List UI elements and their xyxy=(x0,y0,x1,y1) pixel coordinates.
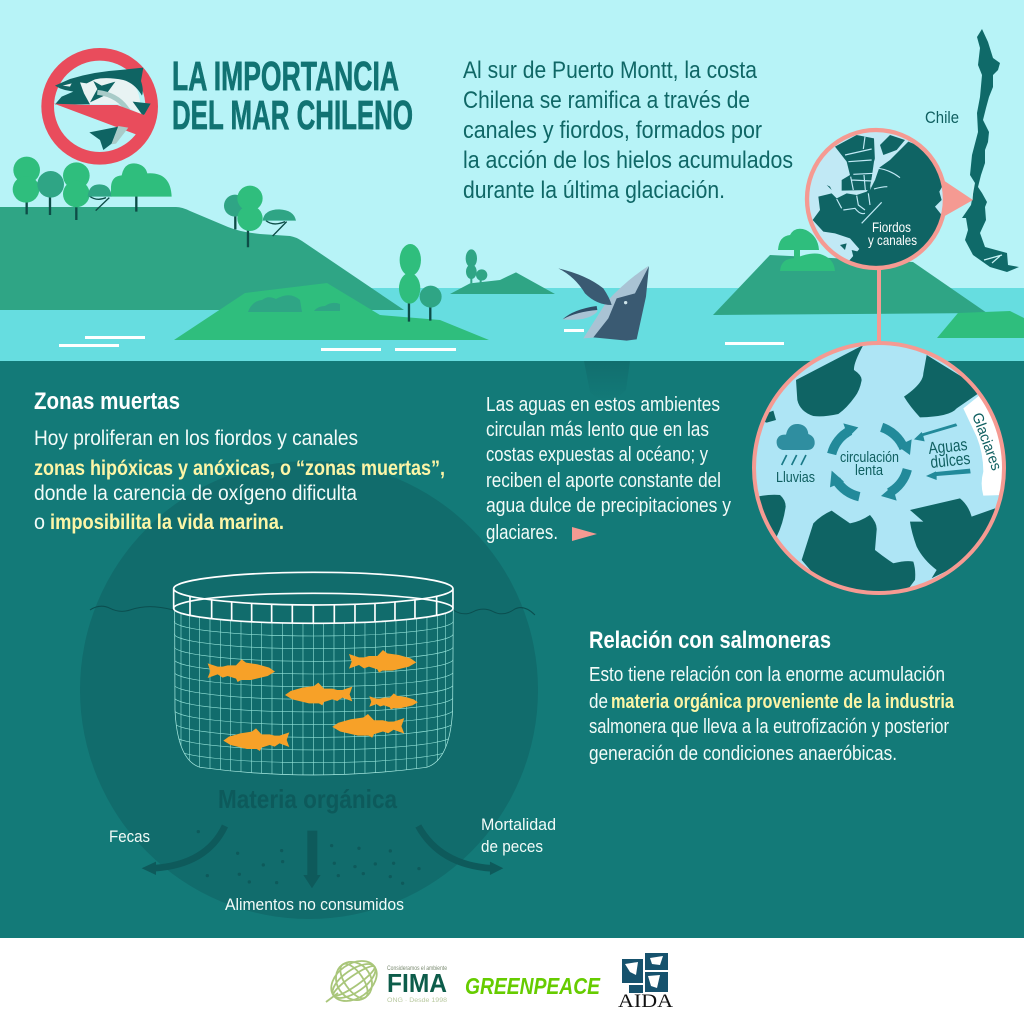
label fiordos y canales: Fiordos xyxy=(872,219,911,235)
right island xyxy=(713,255,987,315)
cage labels: Fecas xyxy=(109,827,150,846)
salmoneras block: generación de condiciones anaeróbicas. xyxy=(589,743,897,765)
circulation paragraph: glaciares. xyxy=(486,522,558,544)
Chile map xyxy=(962,29,1019,272)
intro paragraph: canales y fiordos, formados por xyxy=(463,117,762,144)
zonas muertas block xyxy=(34,388,445,534)
circulation paragraph xyxy=(486,394,731,544)
circle labels: dulces xyxy=(929,449,971,472)
circle labels: lenta xyxy=(855,462,884,479)
circle labels: Lluvias xyxy=(776,469,815,486)
salmoneras block: Esto tiene relación con la enorme acumulación xyxy=(589,664,945,686)
logo FIMA xyxy=(324,953,448,1009)
salmon xyxy=(55,68,151,116)
far right green island xyxy=(937,311,1024,338)
fish cage illustration xyxy=(90,572,535,888)
circle labels xyxy=(776,411,1005,486)
circle labels: Glaciares xyxy=(968,411,1005,473)
label fiordos y canales: y canales xyxy=(868,232,917,248)
zonas muertas block: donde la carencia de oxígeno dificulta xyxy=(34,482,357,505)
circulation circle diagram xyxy=(753,343,1010,600)
prohibition slash xyxy=(54,104,155,134)
salmon tail xyxy=(89,127,118,150)
intro paragraph: la acción de los hielos acumulados xyxy=(463,147,793,174)
rain drops xyxy=(782,455,806,465)
title: DEL MAR CHILENO xyxy=(172,92,413,138)
trees on green island xyxy=(399,244,442,322)
circle ring xyxy=(754,343,1004,593)
title xyxy=(172,53,413,138)
logo AIDA: AIDA xyxy=(618,991,673,1012)
bushes on green island xyxy=(248,295,340,312)
logo Greenpeace: GREENPEACE xyxy=(465,973,601,999)
left hill xyxy=(0,207,404,310)
glacier xyxy=(963,396,1002,496)
label fiordos y canales xyxy=(868,219,917,248)
salmoneras block: materia orgánica proveniente de la industria xyxy=(611,691,955,713)
small far island with trees xyxy=(450,249,555,294)
whale underwater shadow xyxy=(584,361,630,401)
zonas muertas block: Hoy proliferan en los fiordos y canales xyxy=(34,427,358,450)
circulation arrowheads xyxy=(830,423,912,501)
title: LA IMPORTANCIA xyxy=(172,53,399,99)
cage labels: Mortalidad xyxy=(481,815,556,834)
pink arrow xyxy=(572,527,597,541)
dark circle behind fish cage xyxy=(80,461,538,919)
footer band xyxy=(0,938,1024,1024)
sea surface xyxy=(0,288,1024,361)
right island tree and bush xyxy=(778,229,835,271)
salmoneras block: salmonera que lleva a la eutrofización y posterior xyxy=(589,716,949,738)
deep sea panel xyxy=(0,361,1024,938)
intro paragraph: Al sur de Puerto Montt, la costa xyxy=(463,57,758,84)
falling waste arrows xyxy=(142,826,503,888)
humpback whale xyxy=(558,266,649,341)
cage labels: de peces xyxy=(481,837,543,856)
circulation paragraph: reciben el aporte constante del xyxy=(486,470,721,492)
circulation paragraph: agua dulce de precipitaciones y xyxy=(486,495,731,517)
logo FIMA: Consideramos el ambiente xyxy=(387,966,448,972)
salmon in cage xyxy=(208,650,418,751)
sky background xyxy=(0,0,1024,300)
forest trees on left hill xyxy=(13,157,296,247)
intro paragraph xyxy=(463,57,793,204)
connector line xyxy=(877,266,881,346)
circulation paragraph: costas expuestas al océano; y xyxy=(486,444,708,466)
zonas muertas block: Zonas muertas xyxy=(34,388,180,415)
cage labels: Materia orgánica xyxy=(218,784,397,814)
salmoneras block xyxy=(589,627,955,765)
zonas muertas block: zonas hipóxicas y anóxicas, o “zonas muertas”, xyxy=(34,457,445,480)
food pellets xyxy=(197,830,421,885)
logo FIMA: FIMA xyxy=(387,968,447,998)
circulation paragraph: circulan más lento que en las xyxy=(486,419,709,441)
cage labels: Alimentos no consumidos xyxy=(225,895,404,914)
label Chile: Chile xyxy=(925,108,959,127)
fjords map circle xyxy=(807,130,950,275)
fresh water arrows xyxy=(914,423,971,480)
intro paragraph: durante la última glaciación. xyxy=(463,177,725,204)
logo FIMA: ONG · Desde 1998 xyxy=(387,998,448,1004)
circle labels: Aguas xyxy=(927,435,968,458)
zonas muertas block: imposibilita la vida marina. xyxy=(50,511,284,534)
green island xyxy=(174,283,489,340)
net outline xyxy=(175,608,453,775)
circulation paragraph: Las aguas en estos ambientes xyxy=(486,394,720,416)
circle labels: circulación xyxy=(840,449,899,466)
floating ring xyxy=(174,572,453,623)
rain cloud icon xyxy=(777,424,815,450)
zonas muertas block: o xyxy=(34,511,45,534)
salmoneras block: Relación con salmoneras xyxy=(589,627,831,654)
intro paragraph: Chilena se ramifica a través de xyxy=(463,87,750,114)
no fishing sign xyxy=(41,48,158,165)
cage labels xyxy=(109,784,556,914)
wave highlights xyxy=(59,329,784,351)
circulation arrows xyxy=(832,427,907,497)
salmoneras block: de xyxy=(589,691,608,713)
logo AIDA xyxy=(618,953,673,1012)
pointer triangle to Chile xyxy=(943,180,973,217)
